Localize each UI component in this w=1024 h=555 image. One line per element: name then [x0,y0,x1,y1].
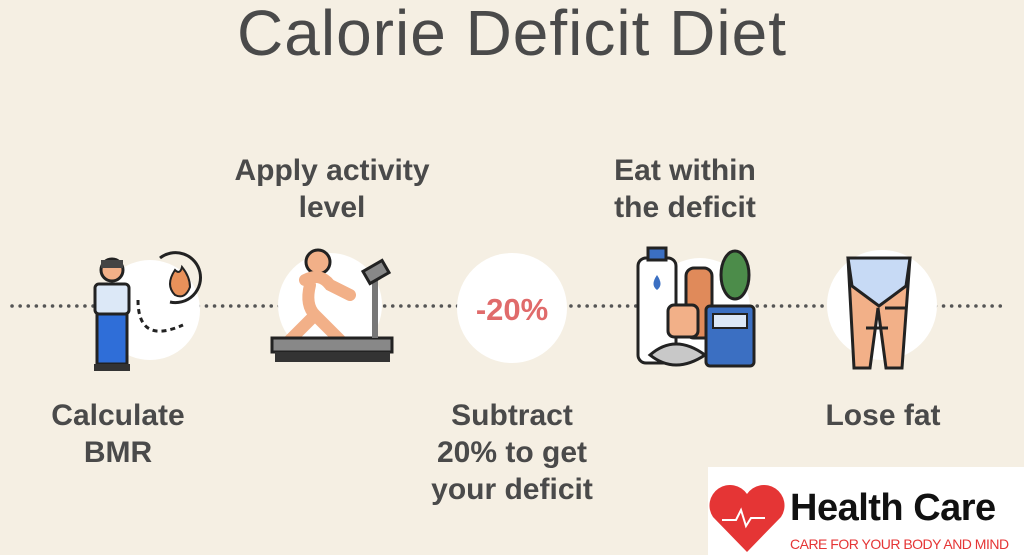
label: apply activity: level [299,191,365,224]
label: subtract: your deficit [431,473,593,506]
logo text: Health Care [790,487,996,529]
label: subtract [431,399,593,506]
label: calculate BMR: Calculate [51,399,185,432]
label: lose fat: Lose fat [825,399,941,432]
label: eat within: Eat within [614,154,756,187]
icon: -20%: -20% [476,292,548,327]
label: eat within: the deficit [614,191,756,224]
icon: BMR person [94,253,201,371]
label: subtract: Subtract [451,399,573,432]
label: eat within [614,154,756,224]
icon: treadmill [272,250,392,362]
label: apply activity [234,154,430,224]
tagline: CARE FOR YOUR BODY AND MIND [790,536,1009,552]
label: apply activity: Apply activity [234,154,430,187]
icon: food and calculator [638,248,754,366]
label: subtract: 20% to get [437,436,587,469]
logo [708,467,1024,555]
label: calculate BMR: BMR [84,436,152,469]
icon: -20% [457,253,567,363]
label: calculate BMR [51,399,185,469]
icon: legs lose fat [827,250,937,368]
icon: heart [710,485,784,552]
